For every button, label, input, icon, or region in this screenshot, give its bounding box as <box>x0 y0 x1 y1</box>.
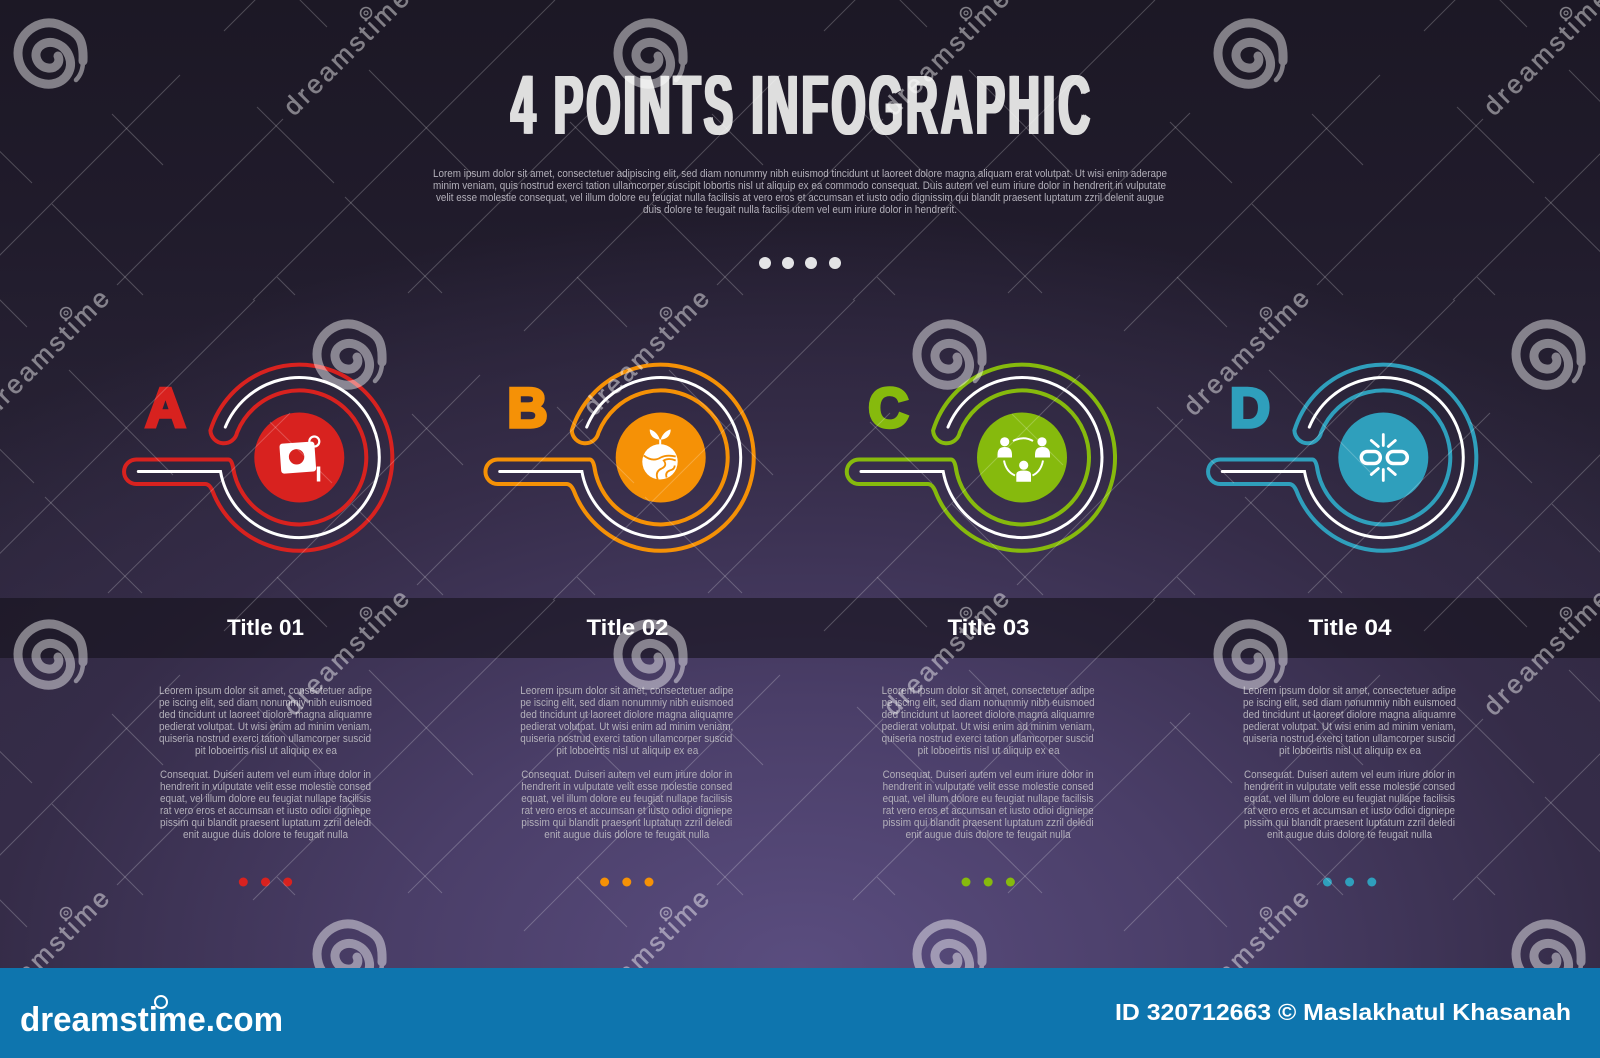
intro text block: velit esse molestie consequat, vel illum dolore eu feugiat nulla facilisis at vero eros et accumsan et iusto odio dignissim qui blandit praesent luptatum zzril delenit augue <box>436 192 1164 204</box>
watermark overlay: dreamstime <box>1177 283 1315 421</box>
watermark overlay: dreamstime <box>577 283 715 421</box>
intro text block: duis dolore te feugait nulla facilisi utem vel eum iriure dolor in hendrerit. <box>643 204 957 216</box>
body text A <box>159 685 372 841</box>
body text B: pedierat volutpat. Ut wisi enim ad minim veniam, <box>520 721 733 733</box>
intro text block: Lorem ipsum dolor sit amet, consectetuer adipiscing elit, sed diam nonummy nibh euismod tincidunt ut laoreet dolore magna aliquam erat volutpat. Ut wisi enim aderape <box>433 168 1167 180</box>
body text B <box>520 685 733 841</box>
body text A: pe iscing elit, sed diam nonummiy nibh euismoed <box>159 697 372 709</box>
panel: point C <box>847 365 1115 886</box>
title 02: Title 02 <box>586 615 668 640</box>
body text D: pissim qui blandit praesent luptatum zzril deledi <box>1244 817 1455 829</box>
body text D: ded tincidunt ut laoreet diolore magna aliquamre <box>1243 709 1456 721</box>
body text C: pe iscing elit, sed diam nonummiy nibh euismoed <box>882 697 1095 709</box>
body text A: equat, vel illum dolore eu feugiat nullape facilisis <box>160 793 371 805</box>
dots D <box>1323 878 1376 886</box>
body text B: quiseria nostrud exerci tation ullamcorper suscid <box>520 733 732 745</box>
body text D <box>1243 685 1456 841</box>
body text C: pit loboeirtis nisl ut aliquip ex ea <box>918 745 1060 757</box>
dots C <box>962 878 1015 886</box>
body text B: rat vero eros et accumsan et iusto odioi digniepe <box>521 805 732 817</box>
title 03: Title 03 <box>948 615 1030 640</box>
icon: tape measure <box>279 436 320 482</box>
body text C: pissim qui blandit praesent luptatum zzril deledi <box>883 817 1094 829</box>
ring diagram A <box>124 365 392 551</box>
body text A: pit loboeirtis nisl ut aliquip ex ea <box>195 745 338 757</box>
body text A: rat vero eros et accumsan et iusto odioi digniepe <box>160 805 371 817</box>
body text D: Leorem ipsum dolor sit amet, consectetuer adipe <box>1243 685 1456 697</box>
body text A: Consequat. Duiseri autem vel eum iriure dolor in <box>160 769 371 781</box>
body text B: enit augue duis dolore te feugait nulla <box>544 829 710 841</box>
icon: connected people <box>998 437 1050 482</box>
panel: point A <box>124 365 392 886</box>
body text C: rat vero eros et accumsan et iusto odioi digniepe <box>883 805 1094 817</box>
body text A: hendrerit in vulputate velit esse molestie consed <box>160 781 371 793</box>
band: title strip <box>0 598 1600 658</box>
watermark overlay: dreamstime <box>1177 883 1315 1021</box>
body text D: pedierat volutpat. Ut wisi enim ad minim veniam, <box>1243 721 1456 733</box>
body text D: pe iscing elit, sed diam nonummiy nibh euismoed <box>1243 697 1456 709</box>
icon: broken chain <box>1361 434 1407 480</box>
letter C: C <box>868 376 909 439</box>
icon: plant globe <box>642 430 678 480</box>
ring diagram B <box>485 365 754 551</box>
body text B: Consequat. Duiseri autem vel eum iriure dolor in <box>521 769 732 781</box>
body text B: pissim qui blandit praesent luptatum zzril deledi <box>521 817 732 829</box>
body text D: quiseria nostrud exerci tation ullamcorper suscid <box>1243 733 1455 745</box>
ring diagram C <box>847 365 1115 551</box>
panel: point B <box>485 365 754 886</box>
body text A: ded tincidunt ut laoreet diolore magna aliquamre <box>159 709 372 721</box>
footer logo: dreamstime.com <box>20 1001 283 1039</box>
body text C: quiseria nostrud exerci tation ullamcorper suscid <box>882 733 1094 745</box>
body text A: pissim qui blandit praesent luptatum zzril deledi <box>160 817 371 829</box>
body text A: Leorem ipsum dolor sit amet, consectetuer adipe <box>159 685 372 697</box>
body text C: hendrerit in vulputate velit esse molestie consed <box>883 781 1094 793</box>
intro text block <box>433 168 1167 216</box>
body text C: ded tincidunt ut laoreet diolore magna aliquamre <box>882 709 1095 721</box>
body text B: pe iscing elit, sed diam nonummiy nibh euismoed <box>520 697 733 709</box>
body text C: Leorem ipsum dolor sit amet, consectetuer adipe <box>882 685 1095 697</box>
body text D: Consequat. Duiseri autem vel eum iriure dolor in <box>1244 769 1455 781</box>
body text D: pit loboeirtis nisl ut aliquip ex ea <box>1279 745 1422 757</box>
top dots <box>759 257 841 269</box>
footer bar <box>0 968 1600 1058</box>
watermark overlay: dreamstime <box>277 583 415 721</box>
body text C: enit augue duis dolore te feugait nulla <box>906 829 1071 841</box>
letter B: B <box>507 376 548 439</box>
body text A: quiseria nostrud exerci tation ullamcorper suscid <box>159 733 371 745</box>
body text D: rat vero eros et accumsan et iusto odioi digniepe <box>1244 805 1455 817</box>
body text B: ded tincidunt ut laoreet diolore magna aliquamre <box>520 709 733 721</box>
title 04: Title 04 <box>1308 615 1392 640</box>
body text A: pedierat volutpat. Ut wisi enim ad minim veniam, <box>159 721 372 733</box>
dots A <box>239 878 292 886</box>
body text D: equat, vel illum dolore eu feugiat nullape facilisis <box>1244 793 1455 805</box>
body text C <box>882 685 1095 841</box>
body text D: enit augue duis dolore te feugait nulla <box>1267 829 1433 841</box>
body text A: enit augue duis dolore te feugait nulla <box>183 829 349 841</box>
body text C: Consequat. Duiseri autem vel eum iriure dolor in <box>883 769 1094 781</box>
body text B: Leorem ipsum dolor sit amet, consectetuer adipe <box>520 685 733 697</box>
body text C: equat, vel illum dolore eu feugiat nullape facilisis <box>883 793 1094 805</box>
body text B: equat, vel illum dolore eu feugiat nullape facilisis <box>521 793 733 805</box>
watermark overlay: dreamstime <box>877 583 1015 721</box>
body text D: hendrerit in vulputate velit esse molestie consed <box>1244 781 1455 793</box>
intro text block: minim veniam, quis nostrud exerci tation ullamcorper suscipit lobortis nisl ut aliquip ex ea commodo consequat. Duis autem vel eum iriure dolor in hendrerit in vulputate <box>433 180 1166 192</box>
body text C: pedierat volutpat. Ut wisi enim ad minim veniam, <box>882 721 1095 733</box>
letter A: A <box>145 376 186 439</box>
body text B: pit loboeirtis nisl ut aliquip ex ea <box>556 745 699 757</box>
letter D: D <box>1230 376 1270 439</box>
title 01: Title 01 <box>227 615 304 640</box>
title: 4 POINTS INFOGRAPHIC <box>511 58 1093 152</box>
watermark overlay: dreamstime <box>577 883 715 1021</box>
body text B: hendrerit in vulputate velit esse molestie consed <box>521 781 732 793</box>
footer credit: ID 320712663 © Maslakhatul Khasanah <box>1115 999 1571 1025</box>
dots B <box>600 878 654 886</box>
panel: point D <box>1208 365 1476 886</box>
ring diagram D <box>1208 365 1476 551</box>
icon: logo swirl <box>155 996 167 1008</box>
